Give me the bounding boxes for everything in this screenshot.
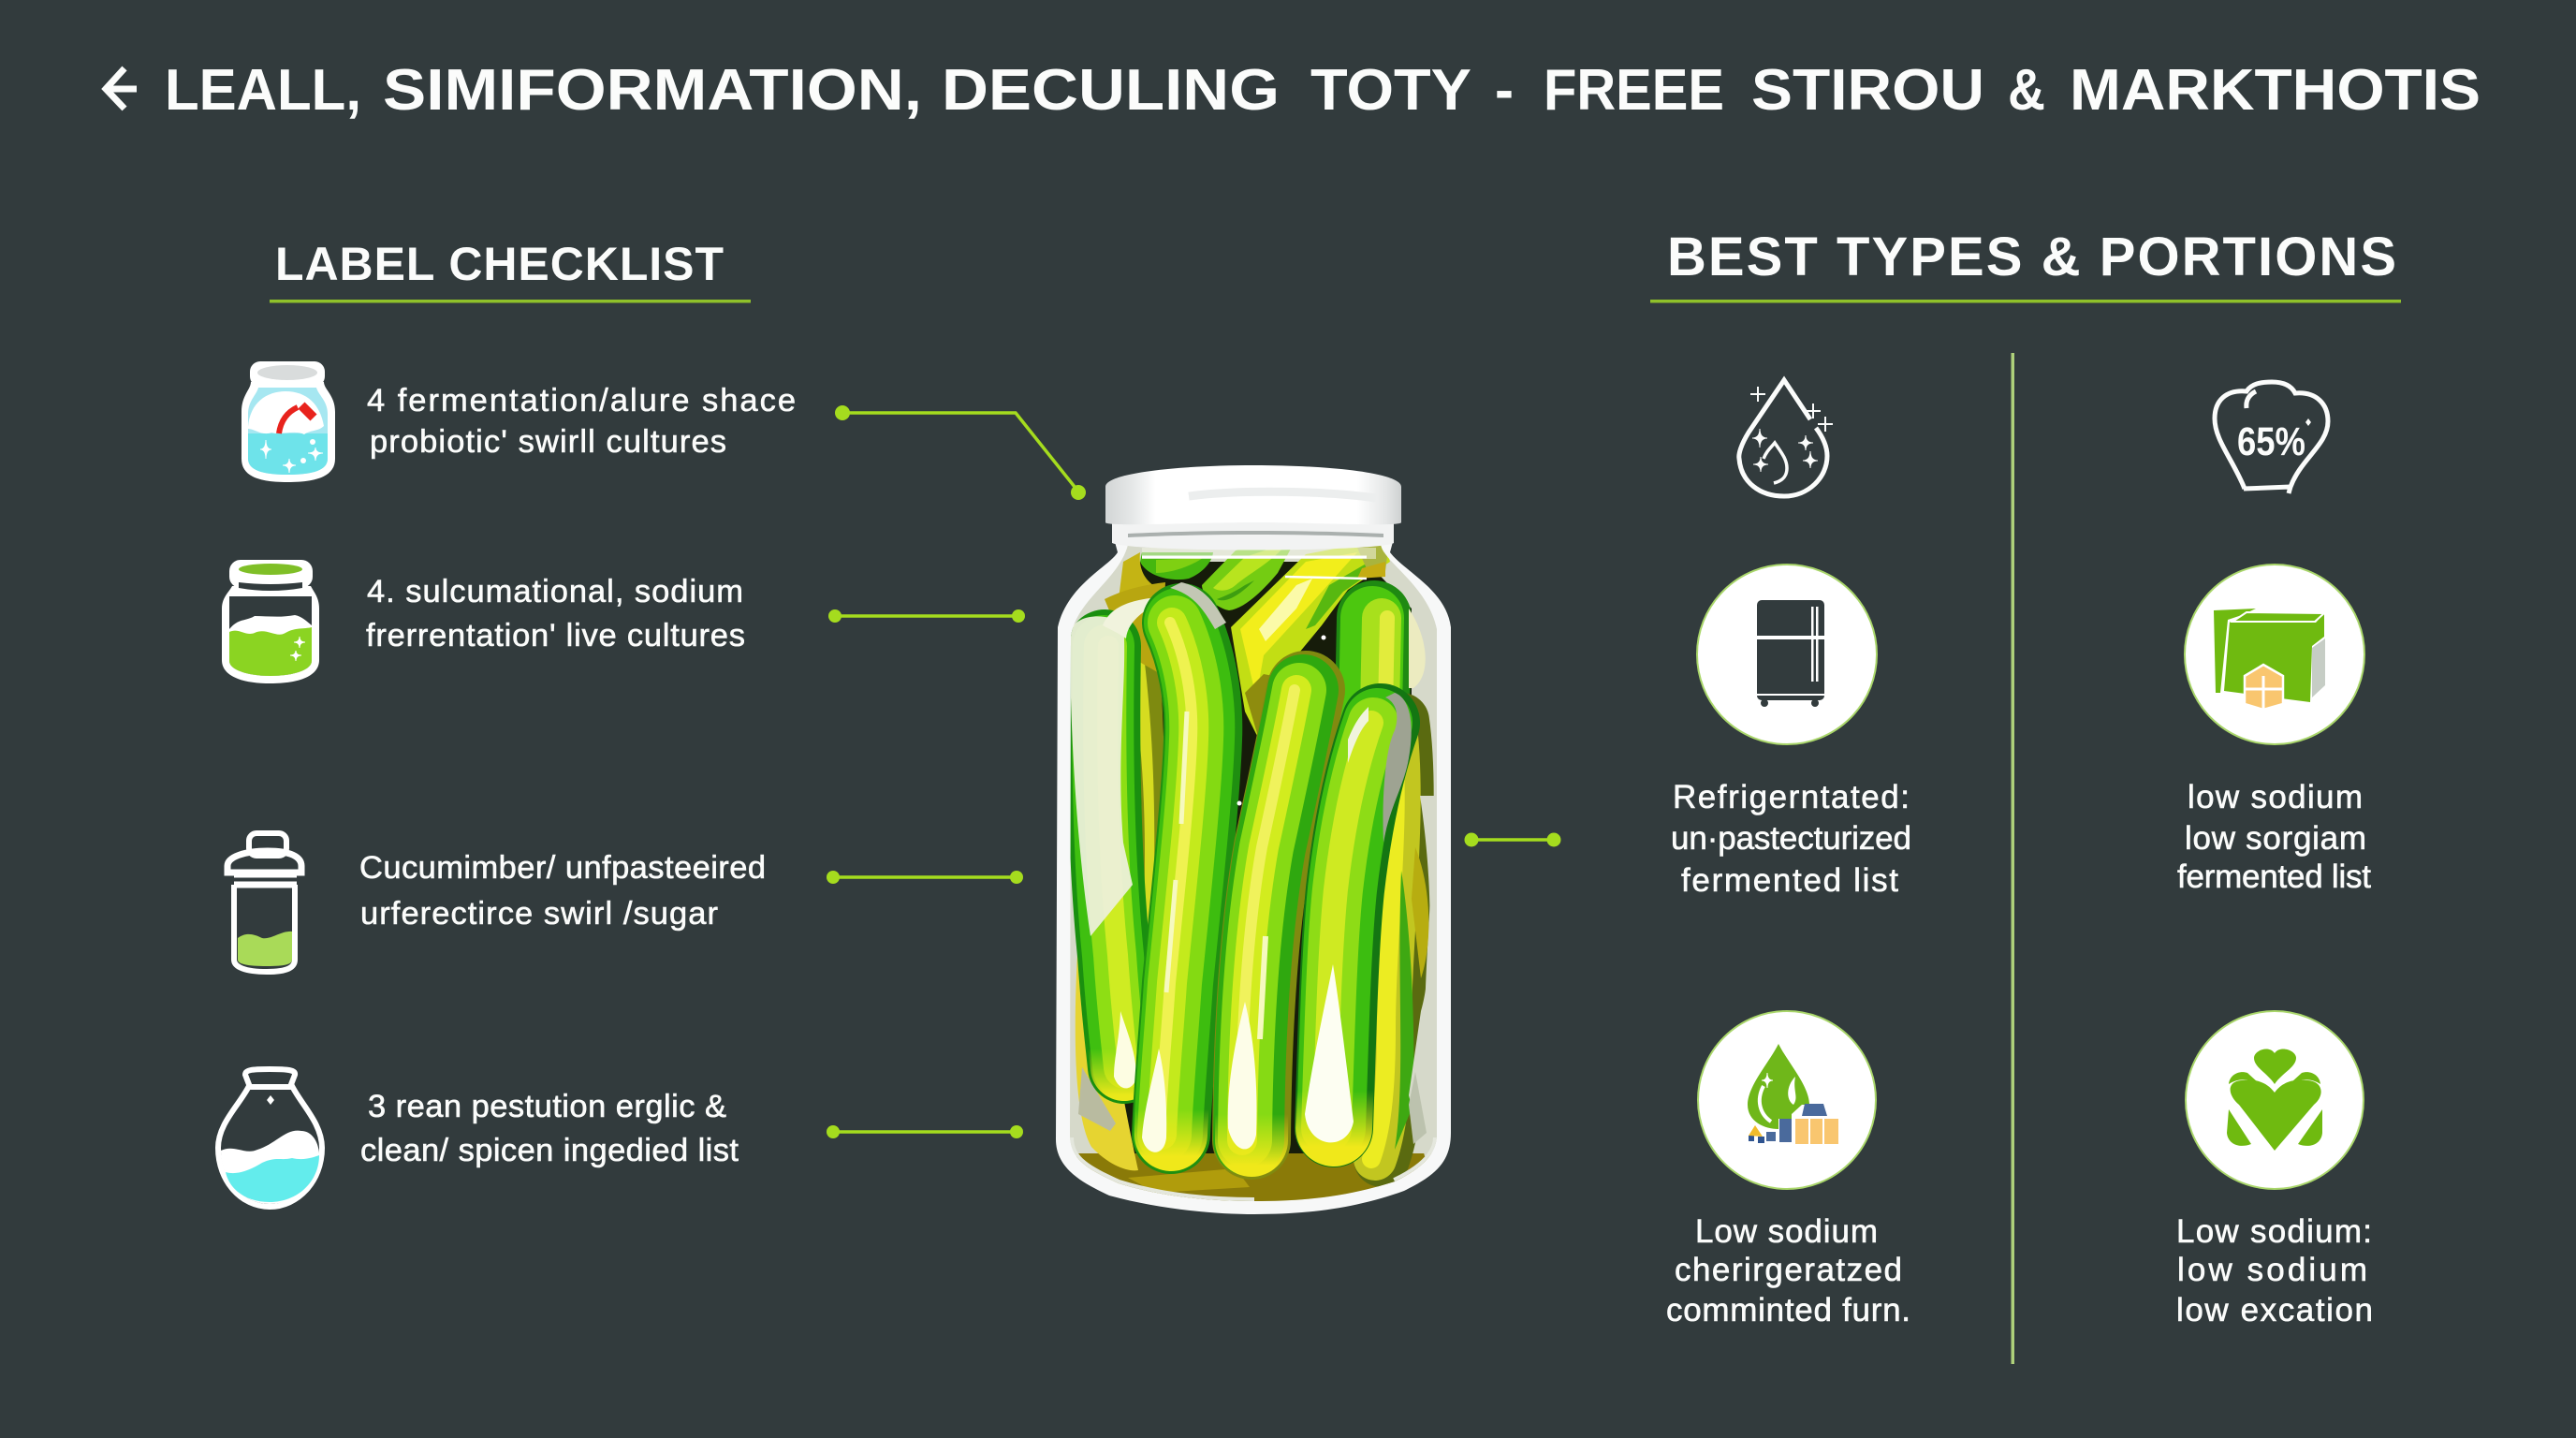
icon: jar with green liquid [222,560,319,683]
pickle right rear [1371,618,1374,758]
pickle far left [1104,646,1124,1067]
text: item 4: clean/ spicen ingedied list [360,1133,739,1168]
connector from jar to right panel [1464,833,1561,846]
icon: 65 percent badge: 65% [2237,419,2305,464]
icon: green box in circle [2185,565,2364,744]
text: item 1 [367,383,796,460]
text: refrigerated [1671,779,1911,899]
panel: label checklist items [218,361,1086,1207]
text: item 2: frerrentation' live cultures [366,618,745,653]
icon: round flask [218,1069,322,1207]
text: low sodium left: Low sodium [1695,1213,1878,1250]
heading: best types and portions: BEST TYPES & PORTIONS [1667,227,2396,287]
pickle centre-left [1171,623,1203,1135]
pickle right yellow [1382,721,1406,1159]
text: refrigerated: Refrigerntated: [1673,779,1910,815]
icon: drop and boxes in circle [1698,1011,1876,1189]
highlights on liquid line [1142,548,1376,559]
icon: back arrow [106,68,137,109]
title: STIROU [1751,58,1984,123]
text: low sodium low sorgiam: low sorgiam [2185,820,2366,857]
connector 2 [828,609,1025,623]
text: low sodium left: cherirgeratzed [1675,1252,1902,1288]
icon: sparkling drop [1739,380,1833,496]
text: item 3: Cucumimber/ unfpasteeired [359,850,766,886]
text: low sodium right: low excation [2176,1292,2373,1328]
title: MARKTHOTIS [2070,58,2481,123]
text: item 3: urferectirce swirl /sugar [360,896,718,932]
text: item 1: 4 fermentation/alure shace [367,383,796,418]
text: low sodium left [1666,1213,1910,1328]
icon: refrigerator in circle [1697,565,1877,744]
title: LEALL, [165,58,361,123]
glare on left pickle [1070,616,1133,936]
text: low sodium right: Low sodium: [2176,1213,2372,1250]
connector 4 [827,1125,1023,1138]
text: low sodium left: comminted furn. [1666,1292,1910,1328]
pickle right front [1334,723,1381,1128]
text: item 1: probiotic' swirll cultures [370,424,726,460]
text: item 4: 3 rean pestution erglic & [368,1089,726,1124]
icon: shaker bottle [227,833,301,972]
sparkle dots [1322,635,1325,640]
icon: 65 percent badge [2215,382,2328,493]
text: low sodium low sorgiam [2177,779,2371,895]
jar contents [1070,545,1437,1201]
text: low sodium right: low sodium [2177,1252,2367,1288]
pickle far left bottom [1075,955,1138,1170]
title: FREEE [1544,58,1724,123]
text: item 2: 4. sulcumational, sodium [367,574,743,609]
text: item 2 [366,574,745,653]
title: - [1495,58,1514,123]
pickle top small [1202,550,1290,610]
jar glass outer [1056,538,1451,1214]
title: & [2008,58,2045,123]
text: low sodium right [2176,1213,2373,1328]
inner glass edge [1070,1137,1254,1201]
pickle diagonal yellow [1231,539,1390,740]
text: low sodium low sorgiam: fermented list [2177,858,2371,895]
text: low sodium low sorgiam: low sodium [2188,779,2363,815]
liquid at jar bottom [1076,1153,1432,1201]
title: TOTY [1310,58,1471,123]
text: refrigerated: un·pastecturized [1671,820,1911,857]
text: item 4 [360,1089,739,1168]
text: item 3 [359,850,766,932]
jar neck ring [1112,521,1394,550]
icon: hearts in circle [2186,1011,2364,1189]
icon: jar with gauge [242,361,335,482]
text: refrigerated: fermented list [1681,862,1898,899]
pickle top left [1140,552,1213,580]
panel: best types left column [1666,380,1911,1328]
title [106,58,2481,123]
title: SIMIFORMATION, [383,58,922,123]
connector 1 [835,405,1086,500]
heading: label checklist: LABEL CHECKLIST [275,238,724,290]
illustration: pickle jar [1056,465,1451,1217]
panel: best types right column [2176,382,2373,1328]
pickle yellow behind left [1140,665,1164,881]
jar lid [1105,465,1401,524]
connector 3 [827,871,1023,884]
pickle centre [1251,690,1306,1140]
column divider [2011,353,2014,1364]
title: DECULING [942,58,1280,123]
